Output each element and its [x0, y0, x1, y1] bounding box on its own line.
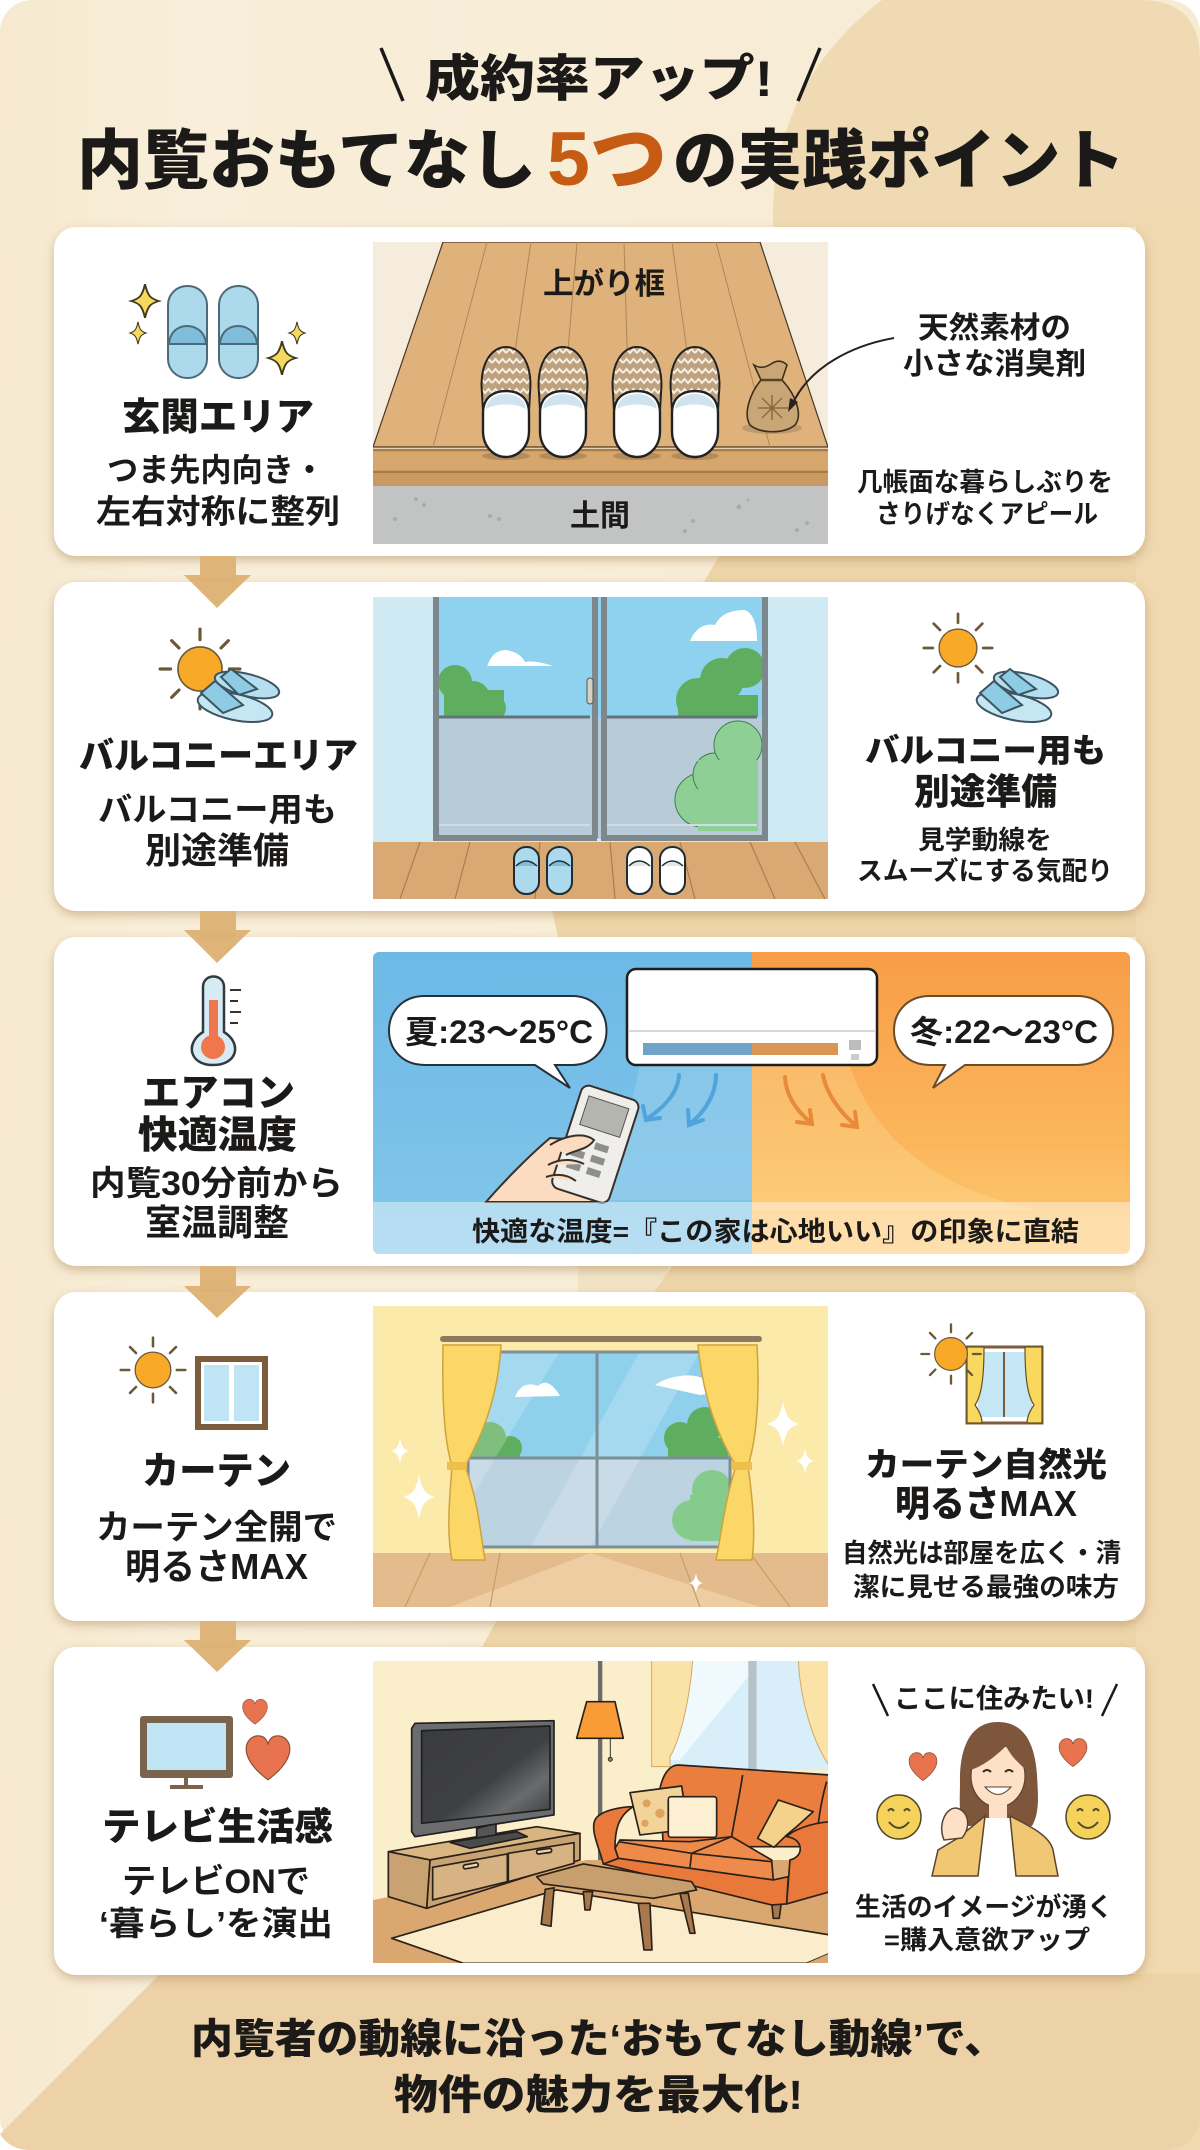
arrow 2 [184, 911, 251, 963]
text: want to live here: ここに住みたい! [894, 1684, 1094, 1714]
hand with remote [486, 1084, 641, 1205]
text: smooth route: 見学動線を [918, 825, 1052, 855]
text: daylight benefit: 潔に見せる最強の味方 [853, 1572, 1119, 1602]
icon: blue slippers with sparkles [130, 284, 305, 378]
main heading: の実践ポイント [673, 124, 1125, 197]
arrow: to deodorant [788, 338, 894, 412]
illustration: bright curtains [373, 1306, 828, 1608]
text: purchase motivation: =購入意欲アップ [884, 1925, 1090, 1955]
heading: balcony area: バルコニーエリア [79, 735, 358, 776]
text: natural deodorant [903, 312, 1086, 381]
illustration: living room [370, 1660, 833, 1970]
cushions [630, 1786, 813, 1847]
airflow arrows [643, 1075, 857, 1127]
illustration: summer and winter AC [373, 952, 1130, 1254]
closing message: 物件の魅力を最大化! [394, 2072, 803, 2118]
text: open curtains: 明るさMAX [125, 1546, 308, 1587]
callout: summer [389, 996, 606, 1088]
panel: curtains [54, 1286, 1145, 1621]
text: adjust 30 minutes before: 内覧30分前から [90, 1165, 343, 1203]
heading: air conditioner: 快適温度 [138, 1115, 297, 1157]
tv [412, 1721, 554, 1848]
text: tidy appeal [857, 467, 1113, 529]
arrow 1 [184, 556, 251, 608]
title [77, 48, 1125, 202]
heading: curtain: カーテン [142, 1451, 291, 1493]
text: purchase motivation [855, 1892, 1113, 1955]
panel: TV [54, 1640, 1145, 1975]
heading: air conditioner: エアコン [142, 1073, 295, 1115]
text: TV on [99, 1863, 333, 1942]
text: open curtains: カーテン全開で [96, 1509, 337, 1547]
sofa [594, 1765, 830, 1918]
illustration: entrance floor with slippers [373, 242, 828, 544]
icon: thermometer [192, 976, 241, 1065]
text: balcony slippers left [98, 791, 337, 871]
text: toes inward: つま先内向き・ [107, 452, 325, 488]
text: TV on: テレビONで [122, 1863, 310, 1901]
text: purchase motivation: 生活のイメージが湧く [855, 1892, 1113, 1922]
heading: entrance area: 玄関エリア [122, 397, 314, 439]
tv cabinet [388, 1827, 580, 1908]
panel: entrance [54, 227, 1145, 556]
main heading [77, 117, 1125, 202]
heading: balcony slippers right [865, 732, 1106, 812]
main heading: 5つ [547, 117, 667, 202]
icon: sun with curtained window [921, 1324, 1042, 1423]
panel: balcony [54, 575, 1145, 911]
text: adjust 30 minutes before [90, 1165, 343, 1243]
heading: curtain daylight: 明るさMAX [895, 1483, 1077, 1524]
text: balcony slippers left: 別途準備 [145, 830, 289, 871]
caption band [373, 1202, 1130, 1254]
text: daylight benefit: 自然光は部屋を広く・清 [842, 1538, 1121, 1568]
arrow 3 [184, 1266, 251, 1318]
text: toes inward: 左右対称に整列 [96, 493, 340, 530]
kicker: 成約率アップ! [425, 51, 773, 107]
main heading: 内覧おもてなし [77, 124, 536, 197]
heading: curtain daylight: カーテン自然光 [865, 1446, 1107, 1483]
icon: sun and window [121, 1338, 268, 1430]
label: agari-kamachi: 上がり框 [543, 267, 665, 301]
icon: sun and slippers right [924, 614, 1061, 728]
illustration: balcony window [373, 597, 828, 899]
heading: balcony slippers right: 別途準備 [914, 771, 1057, 812]
panel: air conditioner [54, 930, 1145, 1266]
text: natural deodorant: 小さな消臭剤 [903, 348, 1086, 381]
callout: winter [894, 996, 1113, 1088]
arrow 4 [184, 1621, 251, 1672]
text: daylight benefit [842, 1538, 1121, 1602]
AC unit [627, 969, 877, 1065]
heading: balcony slippers right: バルコニー用も [865, 732, 1106, 769]
text: tidy appeal: さりげなくアピール [876, 499, 1098, 529]
icon: deodorant bag [742, 361, 802, 434]
heading: curtain daylight [865, 1446, 1107, 1524]
icon: happy woman [877, 1722, 1110, 1876]
label: doma: 土間 [570, 500, 630, 533]
text: smooth route: スムーズにする気配り [857, 856, 1113, 886]
closing message [191, 2016, 1006, 2118]
text: smooth route [857, 825, 1113, 886]
text: natural deodorant: 天然素材の [918, 312, 1071, 345]
callout: summer: 夏:23〜25°C [405, 1014, 593, 1050]
text: TV on: ‘暮らし’を演出 [99, 1905, 333, 1942]
icon: sun and slippers left [160, 629, 282, 728]
heading: air conditioner [138, 1073, 297, 1157]
heading: TV lifestyle: テレビ生活感 [102, 1806, 333, 1849]
text: tidy appeal: 几帳面な暮らしぶりを [857, 467, 1113, 497]
text: adjust 30 minutes before: 室温調整 [145, 1202, 289, 1243]
text: open curtains [96, 1509, 337, 1587]
text: toes inward [96, 452, 340, 530]
icon: TV and hearts [140, 1699, 290, 1787]
kicker [381, 48, 820, 107]
caption band: 快適な温度=『この家は心地いい』の印象に直結 [472, 1217, 1079, 1247]
text: balcony slippers left: バルコニー用も [98, 791, 337, 828]
callout: winter: 冬:22〜23°C [910, 1014, 1098, 1050]
closing message: 内覧者の動線に沿った‘おもてなし動線’で、 [191, 2016, 1006, 2062]
coffee table [537, 1864, 697, 1950]
